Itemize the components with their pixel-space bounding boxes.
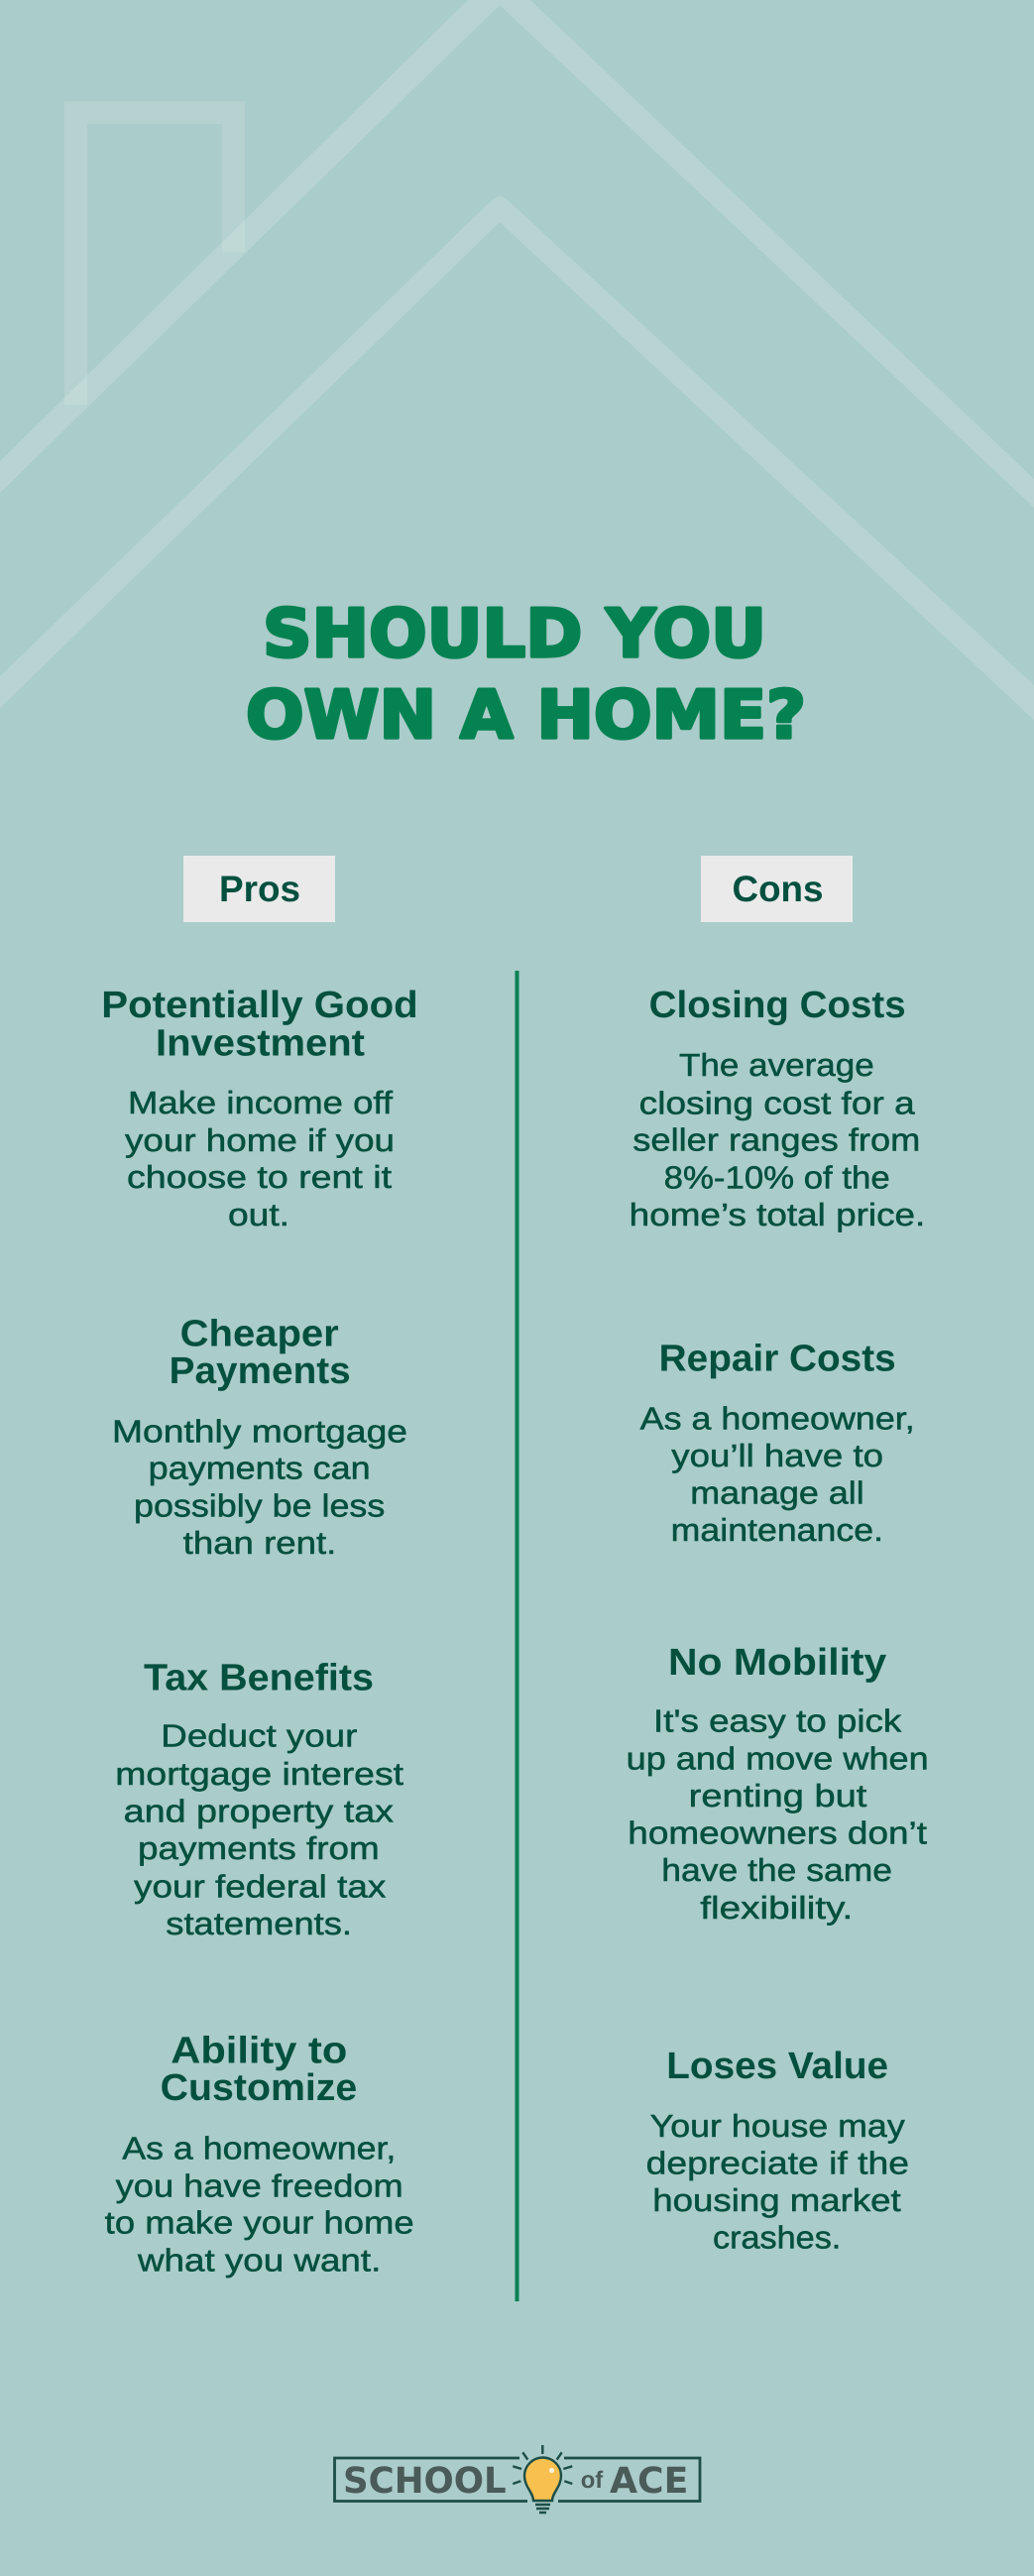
text block: you’ll have to: [671, 1438, 883, 1473]
text block: housing market: [652, 2182, 901, 2218]
text block: flexibility.: [700, 1890, 853, 1926]
panel: pro potentially good investment: [101, 985, 418, 1232]
label: cons: Cons: [732, 869, 823, 909]
text block: [627, 1703, 929, 1926]
text block: [125, 1085, 395, 1232]
text block: seller ranges from: [632, 1122, 920, 1158]
heading: Closing Costs: [649, 985, 906, 1026]
text block: possibly be less: [134, 1487, 385, 1523]
text block: what you want.: [137, 2242, 381, 2278]
text block: depreciate if the: [646, 2146, 909, 2181]
heading: Tax Benefits: [144, 1658, 374, 1699]
heading: No Mobility: [668, 1642, 886, 1684]
panel: con closing costs: [630, 985, 925, 1232]
title: OWN A HOME?: [246, 676, 806, 754]
heading: Payments: [170, 1350, 351, 1392]
text block: mortgage interest: [115, 1756, 403, 1792]
logo: School of Ace: [335, 2445, 700, 2513]
text block: maintenance.: [671, 1512, 883, 1548]
text block: 8%-10% of the: [664, 1159, 890, 1195]
text block: [640, 1401, 915, 1548]
logo: School of Ace: SCHOOL: [343, 2461, 507, 2502]
text block: up and move when: [627, 1740, 929, 1776]
text block: [630, 1047, 925, 1232]
text block: Make income off: [128, 1085, 393, 1120]
text block: Monthly mortgage: [112, 1413, 407, 1449]
heading: Customize: [161, 2067, 357, 2109]
panel: con loses value: [646, 2046, 909, 2256]
text block: As a homeowner,: [640, 1401, 915, 1437]
logo: School of Ace: of: [581, 2467, 604, 2494]
text block: statements.: [166, 1906, 352, 1941]
title: [246, 595, 806, 754]
text block: choose to rent it: [127, 1159, 392, 1195]
icon: light bulb: [513, 2445, 572, 2513]
text block: [646, 2108, 909, 2256]
heading: Cheaper: [180, 1313, 339, 1354]
text block: your home if you: [125, 1122, 395, 1158]
heading: Loses Value: [666, 2046, 888, 2087]
panel: con repair costs: [640, 1338, 915, 1548]
heading: [101, 985, 418, 1065]
title: SHOULD YOU: [263, 595, 766, 672]
text block: your federal tax: [134, 1868, 386, 1904]
heading: Repair Costs: [659, 1338, 896, 1379]
heading: [170, 1313, 351, 1392]
text block: Your house may: [650, 2108, 905, 2144]
text block: As a homeowner,: [122, 2131, 396, 2166]
text block: you have freedom: [116, 2167, 403, 2203]
panel: pro tax benefits: [115, 1658, 403, 1941]
text block: and property tax: [124, 1794, 394, 1829]
heading: Potentially Good: [101, 985, 418, 1026]
text block: closing cost for a: [639, 1085, 915, 1120]
panel: pro cheaper payments: [112, 1313, 407, 1561]
panel: con no mobility: [627, 1642, 929, 1926]
text block: to make your home: [105, 2205, 414, 2241]
text block: manage all: [690, 1475, 864, 1511]
text block: have the same: [661, 1852, 892, 1888]
text block: It's easy to pick: [653, 1703, 902, 1739]
label: pros: [183, 856, 335, 922]
text block: home’s total price.: [630, 1197, 925, 1232]
house outline background: [0, 0, 1034, 720]
heading: [161, 2031, 357, 2109]
text block: Deduct your: [161, 1718, 358, 1754]
label: cons: [701, 856, 853, 922]
panel: pro ability to customize: [105, 2031, 414, 2278]
text block: [112, 1413, 407, 1561]
text block: [105, 2131, 414, 2278]
label: pros: Pros: [219, 869, 300, 909]
heading: Investment: [156, 1023, 365, 1065]
text block: homeowners don’t: [628, 1815, 927, 1850]
text block: out.: [228, 1197, 289, 1232]
text block: renting but: [689, 1778, 866, 1814]
text block: payments from: [138, 1830, 380, 1866]
text block: The average: [679, 1047, 874, 1083]
center divider line: [516, 971, 519, 2301]
text block: [115, 1718, 403, 1941]
heading: Ability to: [171, 2031, 347, 2072]
text block: than rent.: [183, 1525, 336, 1561]
logo: School of Ace: ACE: [610, 2461, 688, 2502]
text block: crashes.: [713, 2220, 841, 2256]
text block: payments can: [149, 1451, 371, 1486]
